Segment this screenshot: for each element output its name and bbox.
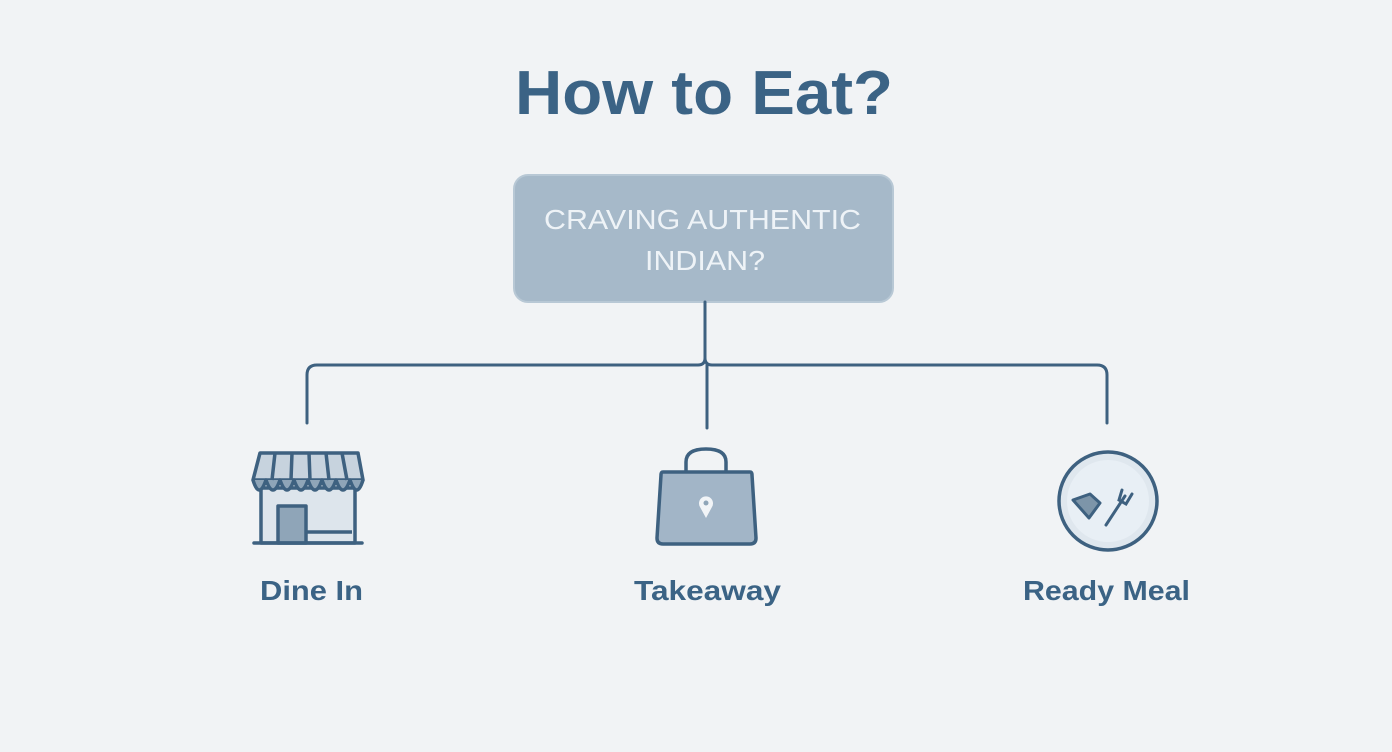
- label: Takeaway: Takeaway: [634, 575, 781, 606]
- question box: [514, 175, 893, 302]
- question box: CRAVING AUTHENTIC: [544, 204, 861, 235]
- connector lines: [307, 302, 1107, 428]
- icon: ready meal plate: [1059, 452, 1157, 550]
- icon: takeaway bag: [657, 449, 756, 544]
- icon: storefront: [253, 453, 363, 543]
- question box: INDIAN?: [645, 245, 765, 276]
- label: Dine In: Dine In: [260, 575, 363, 606]
- label: Ready Meal: Ready Meal: [1023, 575, 1190, 606]
- title: How to Eat?: [515, 59, 893, 128]
